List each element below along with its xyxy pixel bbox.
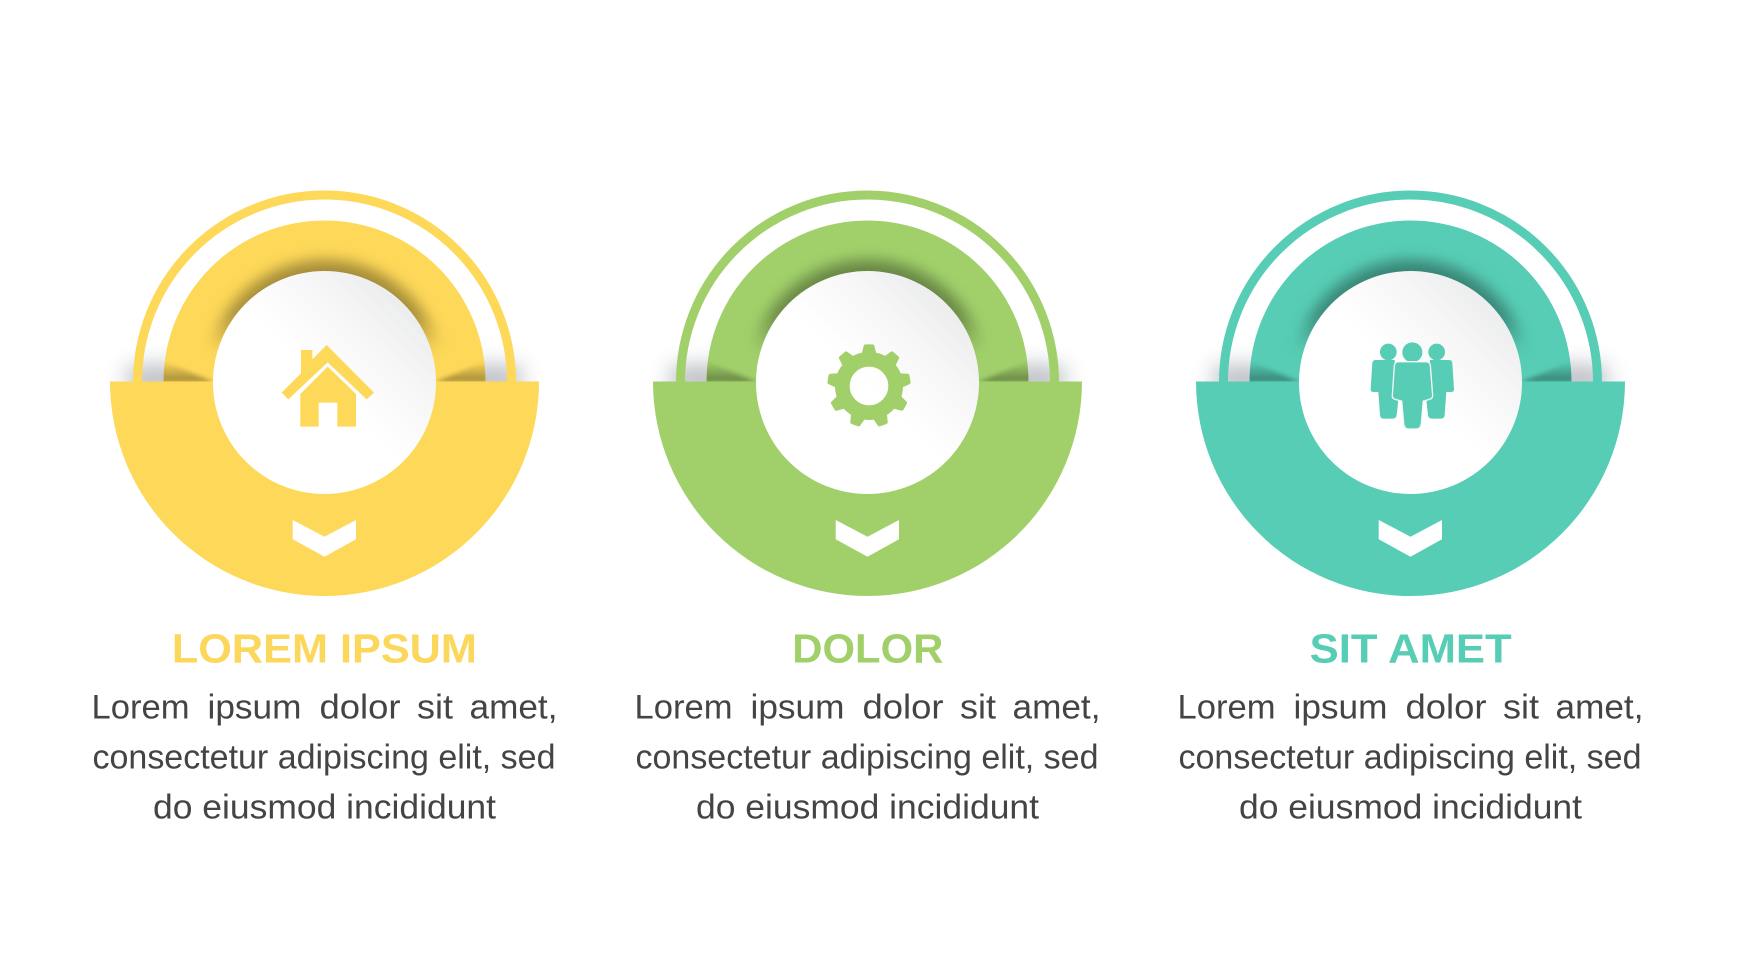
body text: sit [417,688,454,726]
body text: sit [1503,688,1540,726]
icon: gear [827,344,911,428]
band shadows [164,252,486,382]
soft shadow above lower half [128,366,521,392]
upper band [1250,220,1572,382]
body text: do eiusmod incididunt [696,788,1040,826]
body text: Lorem [1178,688,1276,726]
body text: amet, [1012,688,1100,726]
body text: ipsum [208,688,302,726]
body text [634,688,1100,826]
band shadows [1250,252,1572,382]
icon: chevron down [293,520,356,557]
icon: chevron down [1379,520,1442,557]
body text: sit [960,688,997,726]
panel: lorem ipsum [92,195,558,826]
body text: amet, [470,688,558,726]
panel: sit amet [1178,195,1644,826]
lower half circle [110,382,539,596]
body text: consectetur adipiscing elit, sed [636,738,1098,776]
body text: ipsum [1294,688,1388,726]
icon: people [1371,342,1454,428]
outer ring arc [680,195,1054,382]
body text: Lorem [634,688,732,726]
body text: Lorem [92,688,190,726]
body text: dolor [1406,688,1486,726]
band shadows [706,252,1028,382]
outer ring arc [138,195,512,382]
center disc [1299,271,1522,494]
heading: DOLOR [792,626,943,672]
body text: consectetur adipiscing elit, sed [1178,738,1642,776]
soft shadow above lower half [1214,366,1607,392]
body text: dolor [862,688,944,726]
body text [1178,688,1644,826]
icon: chevron down [836,520,899,557]
body text [92,688,558,826]
heading: SIT AMET [1310,626,1512,672]
heading: LOREM IPSUM [172,626,477,672]
body text: ipsum [750,688,844,726]
soft shadow above lower half [671,366,1064,392]
center disc [756,271,979,494]
upper band [164,220,486,382]
body text: amet, [1556,688,1644,726]
lower half circle [653,382,1082,596]
body text: consectetur adipiscing elit, sed [92,738,556,776]
icon: house [282,345,374,427]
upper band [706,220,1028,382]
lower half circle [1196,382,1625,596]
body text: do eiusmod incididunt [153,788,497,826]
center disc [213,271,436,494]
panel: dolor [634,195,1100,826]
body text: do eiusmod incididunt [1239,788,1583,826]
body text: dolor [320,688,400,726]
outer ring arc [1224,195,1598,382]
